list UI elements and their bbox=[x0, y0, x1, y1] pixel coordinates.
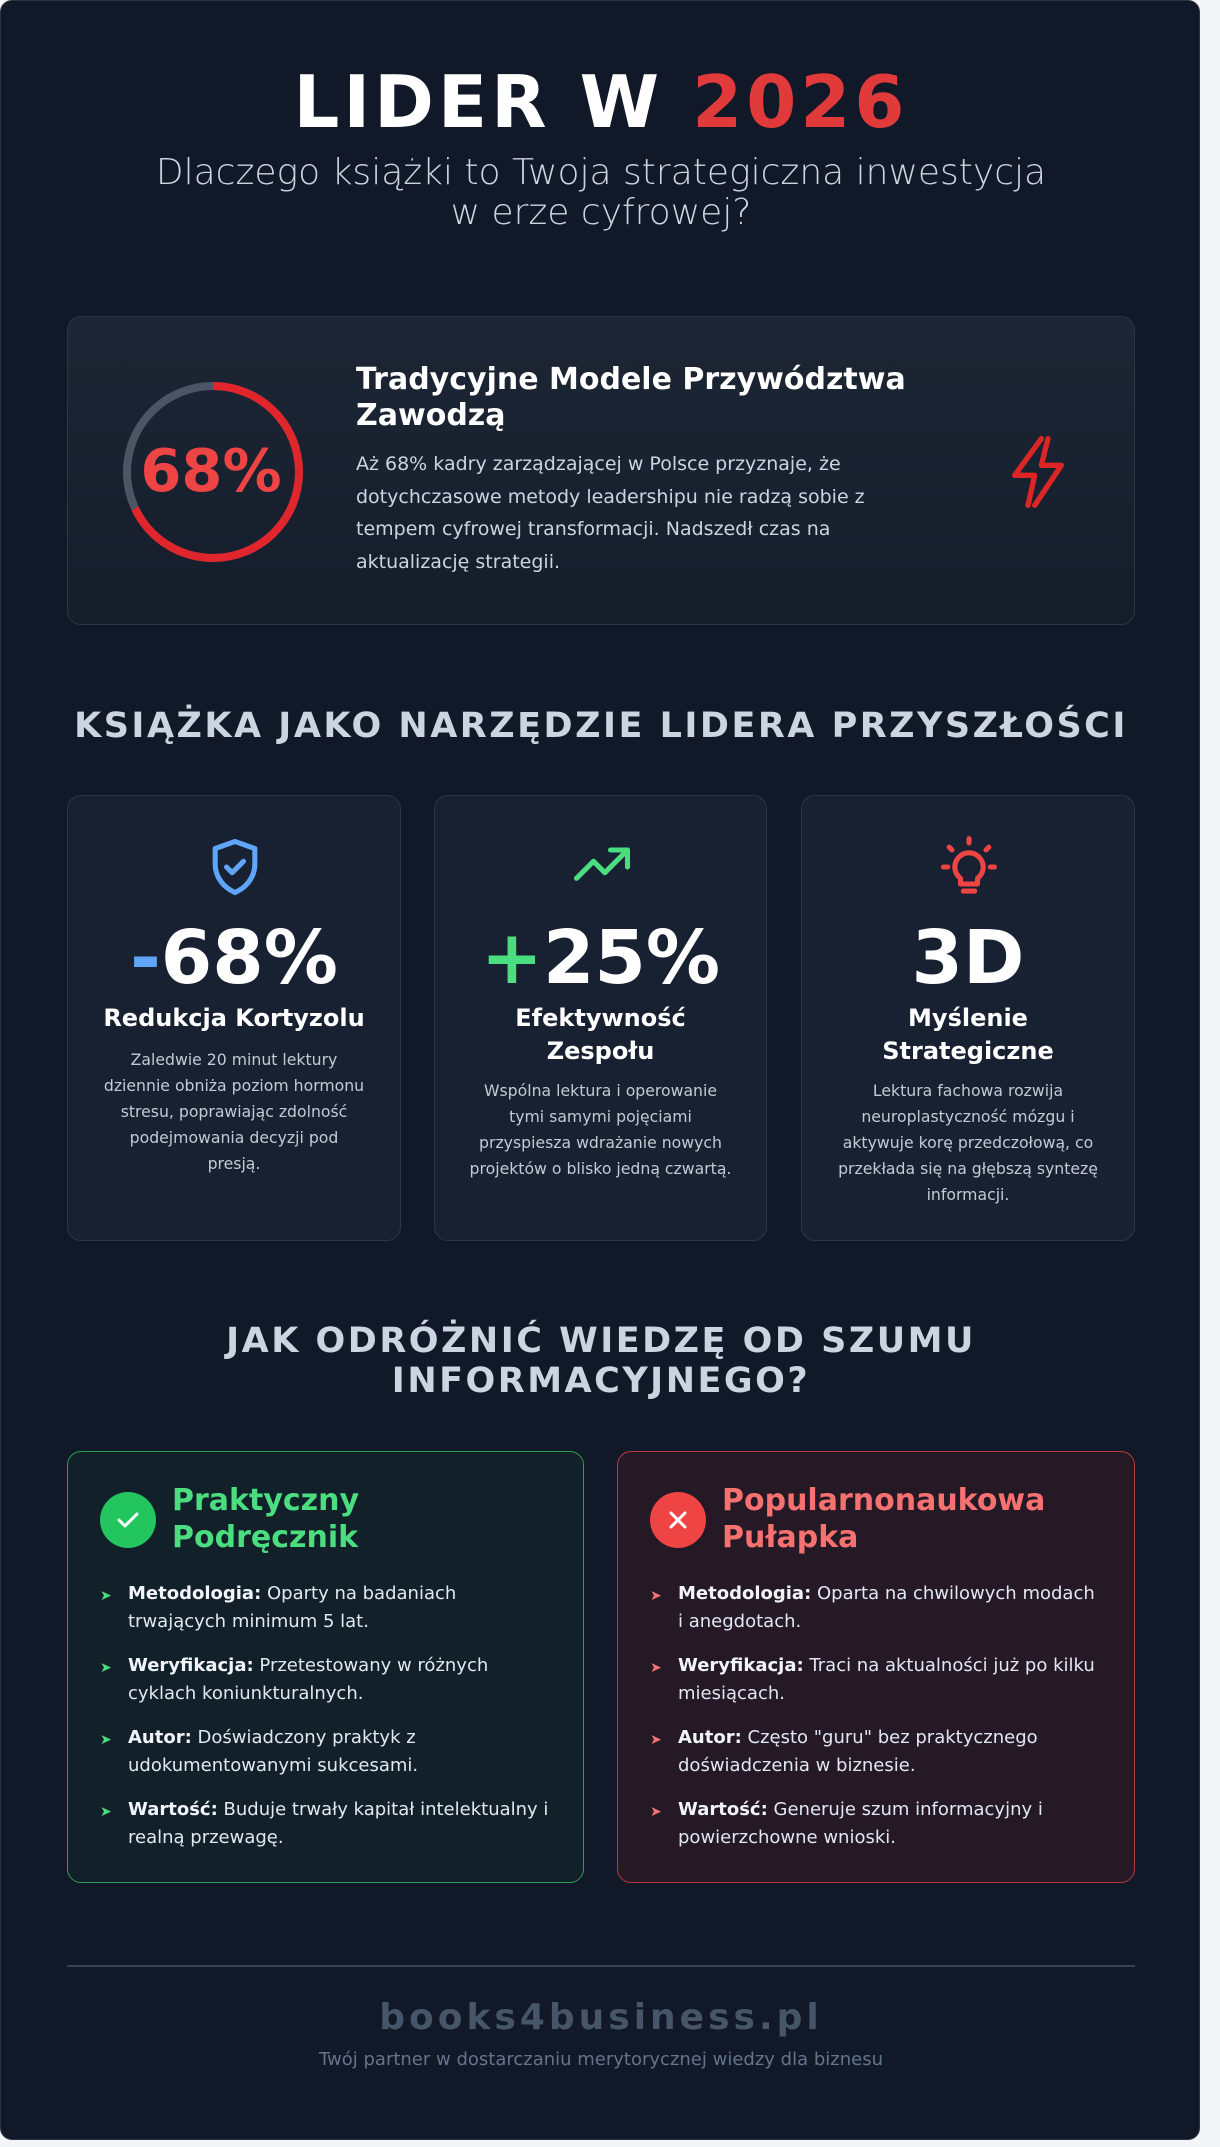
list: Wartość: Buduje trwały kapitał intelektualny i realną przewagę. bbox=[128, 1799, 548, 1848]
list: ➤ bbox=[100, 1804, 112, 1820]
number: -68% bbox=[130, 915, 338, 1001]
subtitle: Dlaczego książki to Twoja strategiczna inwestycja bbox=[156, 152, 1046, 193]
heading: section 1: KSIĄŻKA JAKO NARZĘDZIE LIDERA PRZYSZŁOŚCI bbox=[74, 706, 1128, 746]
list: Autor: Często "guru" bez praktycznego doświadczenia w biznesie. bbox=[678, 1727, 1038, 1776]
label bbox=[882, 1004, 1054, 1065]
heading: section 2 bbox=[224, 1320, 976, 1401]
heading: section 2: JAK ODRÓŻNIĆ WIEDZĘ OD SZUMU bbox=[226, 1321, 976, 1361]
subtitle: w erze cyfrowej? bbox=[451, 192, 751, 233]
list: ➤ bbox=[100, 1588, 112, 1604]
list: Weryfikacja: Przetestowany w różnych cyklach koniunkturalnych. bbox=[128, 1655, 488, 1704]
heading: Podręcznik bbox=[172, 1520, 358, 1555]
footer tagline: Twój partner w dostarczaniu merytorycznej wiedzy dla biznesu bbox=[319, 2049, 883, 2070]
list bbox=[100, 1583, 548, 1848]
label: Redukcja Kortyzolu bbox=[103, 1004, 365, 1032]
chart: 68% ring: 68% bbox=[140, 436, 282, 505]
icon: check bbox=[100, 1492, 156, 1548]
icon: shield bbox=[212, 839, 258, 895]
icon: lightning bbox=[1012, 436, 1064, 508]
list: ➤ bbox=[650, 1732, 662, 1748]
footer brand: books4business.pl bbox=[379, 1997, 823, 2038]
text block: Aż 68% kadry zarządzającej w Polsce przyznaje, że dotychczasowe metody leadershipu nie radzą sobie z tempem cyfrowej transformacji. Nadszedł czas na aktualizację strategii. bbox=[356, 453, 865, 572]
panel: team efficiency bbox=[434, 795, 767, 1241]
list: Weryfikacja: Traci na aktualności już po kilku miesiącach. bbox=[678, 1655, 1095, 1704]
label: Myślenie bbox=[908, 1004, 1028, 1032]
heading bbox=[722, 1483, 1045, 1555]
icon: lightbulb bbox=[941, 836, 997, 894]
list: ➤ bbox=[650, 1660, 662, 1676]
list: ➤ bbox=[100, 1660, 112, 1676]
panel: 3D thinking bbox=[801, 795, 1135, 1241]
number: 3D bbox=[912, 915, 1024, 1001]
label: Efektywność bbox=[515, 1004, 686, 1032]
heading: Tradycyjne Modele Przywództwa Zawodzą bbox=[356, 362, 906, 433]
description: Wspólna lektura i operowanie tymi samymi pojęciami przyspiesza wdrażanie nowych projektów o blisko jedną czwartą. bbox=[470, 1081, 731, 1178]
heading: Pułapka bbox=[722, 1520, 858, 1555]
heading: Popularnonaukowa bbox=[722, 1483, 1045, 1518]
list: Autor: Doświadczony praktyk z udokumentowanymi sukcesami. bbox=[128, 1727, 418, 1776]
description: Zaledwie 20 minut lektury dziennie obniża poziom hormonu stresu, poprawiając zdolność podejmowania decyzji pod presją. bbox=[104, 1050, 364, 1173]
label: Strategiczne bbox=[882, 1037, 1054, 1065]
list: Wartość: Generuje szum informacyjny i powierzchowne wnioski. bbox=[678, 1799, 1043, 1848]
icon: cross bbox=[650, 1492, 706, 1548]
heading: Praktyczny bbox=[172, 1483, 359, 1518]
list bbox=[650, 1583, 1095, 1848]
list: Metodologia: Oparta na chwilowych modach i anegdotach. bbox=[678, 1583, 1095, 1632]
description: Lektura fachowa rozwija neuroplastyczność mózgu i aktywuje korę przedczołową, co przekłada się na głębszą syntezę informacji. bbox=[838, 1081, 1098, 1204]
list: ➤ bbox=[650, 1588, 662, 1604]
subtitle bbox=[156, 152, 1046, 233]
panel: pop-science trap bbox=[617, 1451, 1135, 1883]
heading bbox=[172, 1483, 359, 1555]
label bbox=[515, 1004, 686, 1065]
list: ➤ bbox=[100, 1732, 112, 1748]
label: Zespołu bbox=[547, 1037, 654, 1065]
list: ➤ bbox=[650, 1804, 662, 1820]
chart: 68% ring bbox=[123, 382, 303, 562]
title: LIDER W 2026 bbox=[294, 60, 908, 144]
panel: cortisol bbox=[67, 795, 401, 1241]
list: Metodologia: Oparty na badaniach trwających minimum 5 lat. bbox=[128, 1583, 456, 1632]
number: +25% bbox=[481, 915, 720, 1001]
heading: section 2: INFORMACYJNEGO? bbox=[392, 1361, 810, 1401]
icon: trend up bbox=[574, 848, 630, 881]
panel: practical handbook bbox=[67, 1451, 584, 1883]
panel: hero statistic bbox=[67, 316, 1135, 625]
